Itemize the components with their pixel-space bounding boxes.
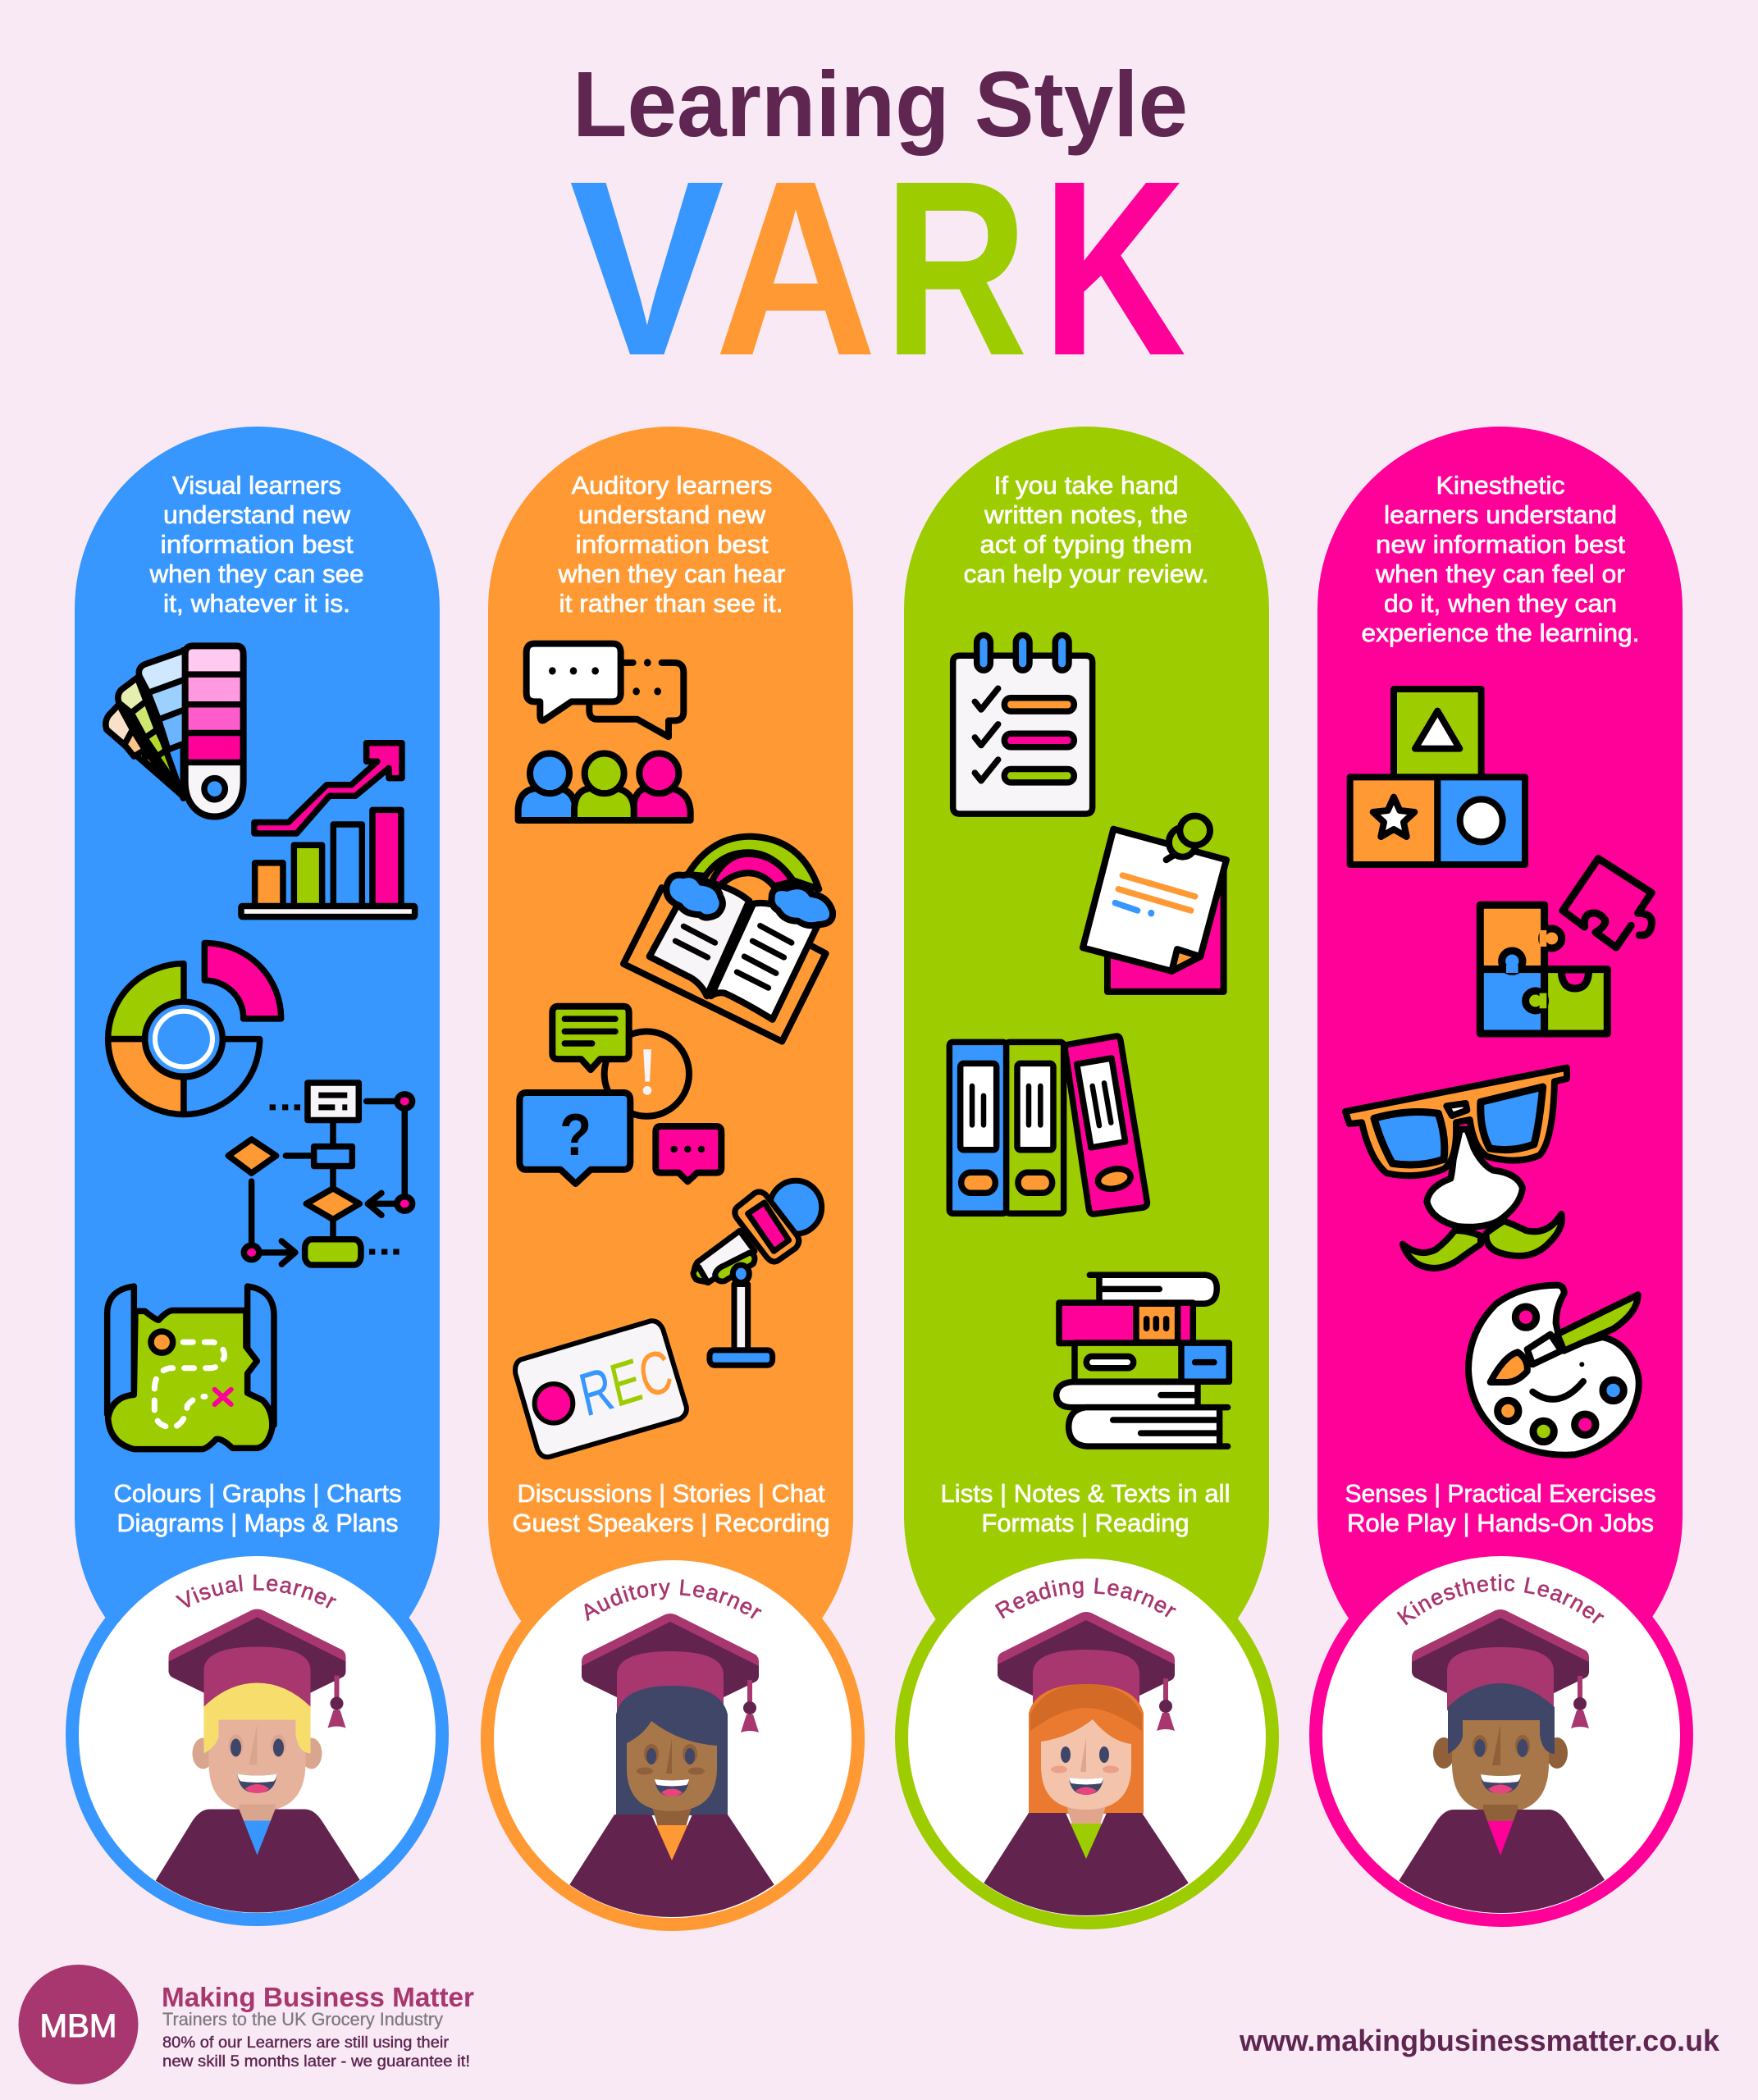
icon: jigsaw puzzle bbox=[1480, 859, 1651, 1034]
bottom text bbox=[1345, 1479, 1655, 1537]
description text: can help your review. bbox=[963, 559, 1209, 588]
description text: Visual learners bbox=[172, 471, 341, 500]
description text bbox=[148, 471, 364, 618]
description text: Kinesthetic bbox=[1436, 471, 1565, 500]
icon: donut chart bbox=[108, 943, 281, 1115]
icon: pinned sticky note bbox=[1083, 816, 1226, 992]
heading: VARK: K bbox=[1042, 130, 1186, 408]
bottom text bbox=[940, 1479, 1231, 1537]
bottom text: Diagrams | Maps & Plans bbox=[116, 1509, 399, 1537]
icon: paint palette and brush bbox=[1468, 1285, 1639, 1455]
bottom text bbox=[512, 1479, 830, 1537]
panel background bbox=[1317, 427, 1683, 1699]
avatar circle bbox=[72, 1550, 442, 1920]
title: Learning Style bbox=[573, 52, 1188, 156]
description text bbox=[1362, 471, 1639, 647]
icon: REC card bbox=[515, 1321, 687, 1457]
badge label: Reading Learner bbox=[994, 1577, 1176, 1619]
icon: treasure map bbox=[107, 1286, 274, 1449]
description text: experience the learning. bbox=[1362, 619, 1639, 647]
icon: question and answer bubbles bbox=[519, 1007, 721, 1184]
avatar: visual learner bbox=[156, 1575, 360, 1913]
avatar: auditory learner bbox=[569, 1579, 774, 1917]
footer company text: 80% of our Learners are still using their bbox=[162, 2034, 450, 2052]
heading: VARK: V bbox=[569, 130, 725, 408]
panel: kinesthetic learners bbox=[1309, 427, 1693, 1927]
icon: novelty glasses with nose and moustache bbox=[1345, 1068, 1567, 1268]
panel background bbox=[75, 427, 440, 1699]
description text: new information best bbox=[1376, 530, 1625, 559]
icon: question and answer bubbles: ? bbox=[559, 1102, 591, 1168]
heading: VARK: A bbox=[715, 130, 877, 408]
description text: do it, when they can bbox=[1384, 589, 1617, 618]
description text: information best bbox=[161, 530, 354, 559]
footer company text: Trainers to the UK Grocery Industry bbox=[162, 2009, 443, 2029]
footer logo: MBM: MBM bbox=[39, 2008, 116, 2044]
icon: open book with rainbow bbox=[623, 837, 833, 1042]
heading: VARK bbox=[569, 130, 1186, 408]
avatar circle bbox=[1316, 1550, 1687, 1920]
description text: when they can see bbox=[148, 559, 364, 588]
footer logo: MBM bbox=[18, 1965, 138, 2084]
badge label: Auditory Learner bbox=[584, 1579, 762, 1621]
icon: ring binders bbox=[949, 1036, 1147, 1214]
footer website url: www.makingbusinessmatter.co.uk bbox=[1239, 2024, 1720, 2057]
description text: written notes, the bbox=[984, 500, 1188, 529]
bottom text: Discussions | Stories | Chat bbox=[517, 1479, 825, 1508]
panel background bbox=[488, 427, 853, 1699]
description text: when they can hear bbox=[557, 559, 786, 588]
panel: visual learners bbox=[66, 427, 449, 1926]
panel background bbox=[904, 427, 1269, 1699]
icon: group of people bbox=[518, 754, 691, 820]
avatar: kinesthetic learner bbox=[1396, 1574, 1605, 1913]
description text bbox=[557, 471, 786, 618]
icon: microphone bbox=[693, 1180, 822, 1365]
badge label: Visual Learner bbox=[176, 1575, 336, 1609]
avatar circle bbox=[902, 1552, 1272, 1923]
description text: it, whatever it is. bbox=[163, 589, 350, 618]
description text: understand new bbox=[578, 500, 766, 529]
bottom text: Formats | Reading bbox=[981, 1509, 1190, 1537]
icon: stack of books bbox=[1057, 1275, 1229, 1446]
description text: it rather than see it. bbox=[559, 589, 783, 618]
icon: checklist notepad bbox=[953, 635, 1093, 814]
description text: act of typing them bbox=[979, 530, 1193, 559]
description text: when they can feel or bbox=[1375, 559, 1625, 588]
bottom text: Guest Speakers | Recording bbox=[512, 1509, 830, 1537]
description text: Auditory learners bbox=[571, 471, 773, 500]
badge label: Kinesthetic Learner bbox=[1396, 1574, 1605, 1626]
icon: colour swatch fan bbox=[106, 646, 244, 817]
bottom text: Colours | Graphs | Charts bbox=[113, 1479, 402, 1508]
footer company text bbox=[162, 1982, 474, 2070]
icon: growth bar chart bbox=[241, 743, 415, 917]
icon: toy blocks bbox=[1350, 689, 1525, 865]
icon: REC card: REC bbox=[573, 1335, 678, 1429]
bottom text: Senses | Practical Exercises bbox=[1345, 1479, 1655, 1508]
description text: If you take hand bbox=[994, 471, 1178, 500]
icon: flow chart bbox=[228, 1083, 413, 1265]
footer company text: Making Business Matter bbox=[162, 1982, 474, 2012]
icon: speech bubbles bbox=[527, 644, 683, 737]
bottom text: Lists | Notes & Texts in all bbox=[940, 1479, 1231, 1508]
description text: understand new bbox=[163, 500, 351, 529]
heading: VARK: R bbox=[884, 130, 1028, 408]
avatar circle bbox=[487, 1554, 858, 1924]
description text bbox=[963, 471, 1209, 588]
description text: information best bbox=[576, 530, 769, 559]
bottom text: Role Play | Hands-On Jobs bbox=[1347, 1509, 1654, 1537]
avatar: reading learner bbox=[984, 1577, 1189, 1915]
panel: reading learners bbox=[895, 427, 1279, 1929]
panel: auditory learners bbox=[481, 427, 865, 1931]
description text: learners understand bbox=[1384, 500, 1617, 529]
bottom text bbox=[113, 1479, 402, 1537]
footer company text: new skill 5 months later - we guarantee it! bbox=[162, 2053, 470, 2070]
